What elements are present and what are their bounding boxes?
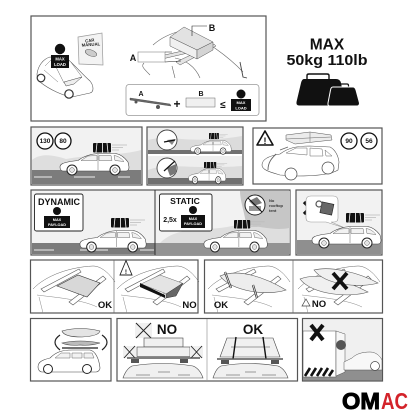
icon: high speed gauge — [157, 158, 177, 178]
icon: car manual — [78, 33, 103, 65]
panel: formula A plus B under max load: + — [173, 97, 181, 111]
panel: formula A plus B under max load: MAX — [237, 100, 246, 105]
icon: speed sign 80: 80 — [59, 138, 67, 145]
icon: no rooftop tent: rooftop — [269, 203, 284, 208]
panel: formula A plus B under max load: B — [198, 91, 204, 98]
icon: no rooftop tent: tent — [269, 208, 277, 213]
diagram: closed sunroof OK: OK — [98, 300, 112, 311]
icon: car manual: CAR — [85, 37, 96, 44]
heading: max load — [286, 36, 368, 69]
diagram: roof rack A and load B: B — [209, 23, 216, 33]
panel: speed gauges — [147, 127, 243, 185]
hazard stripes — [305, 368, 333, 376]
logo: OMAC: OM — [342, 388, 380, 414]
panel: load fitting NO and OK — [117, 318, 298, 381]
icon: black X — [311, 325, 323, 340]
icon: low speed gauge — [157, 130, 177, 150]
diagram: roof rack A and load B — [130, 23, 247, 78]
panel: roof load overview — [31, 16, 266, 121]
diagram: strapped load OK — [213, 322, 288, 378]
SUV with long roof load — [262, 132, 339, 180]
icon: luggage bags — [296, 74, 360, 106]
panel: sunroof OK and NO — [30, 260, 199, 313]
car with large load — [189, 162, 227, 184]
diagram: closed sunroof OK — [33, 266, 115, 313]
panel: formula A plus B under max load: LOAD — [235, 106, 247, 110]
icon: black X — [304, 202, 316, 214]
icon: speed sign 130: 130 — [40, 138, 51, 145]
icon: speed sign 56: 56 — [365, 138, 373, 145]
callout: dynamic max payload: PAYLOAD — [48, 223, 66, 227]
diagram: board strapped OK: OK — [214, 300, 228, 311]
heading: max load: 50kg 110lb — [286, 52, 368, 69]
car with load — [312, 213, 381, 248]
car with dynamic load — [80, 218, 146, 252]
diagram: open sunroof NO: ! — [125, 269, 127, 276]
icon: car with max load — [37, 44, 93, 98]
callout: static max payload — [160, 194, 212, 231]
callout: dynamic max payload: DYNAMIC — [38, 197, 81, 207]
diagram: overhanging load NO — [123, 322, 203, 378]
panel: formula A plus B under max load: ≤ — [220, 100, 226, 111]
icon: no rooftop tent: No — [269, 198, 275, 203]
icon: warning triangle: ! — [264, 136, 266, 146]
icon: speed sign 90: 90 — [345, 138, 353, 145]
diagram: open sunroof NO — [117, 260, 199, 313]
diagram: open sunroof NO: NO — [182, 300, 197, 311]
icon: car with max load: MAX — [55, 56, 65, 62]
heading: max load: MAX — [310, 36, 345, 54]
panel: no garage entry with load — [302, 318, 382, 381]
icon: no rooftop tent — [245, 195, 284, 215]
callout: static max payload: STATIC — [170, 196, 200, 206]
diagram: roof rack A and load B: A — [130, 53, 137, 63]
panel: formula A plus B under max load — [126, 84, 259, 116]
panel: no car wash — [296, 190, 382, 255]
logo: OMAC — [342, 388, 408, 414]
icon: car manual: MANUAL — [81, 41, 101, 48]
panel: formula A plus B under max load: A — [138, 91, 144, 98]
panel: dynamic and static payload — [31, 190, 290, 255]
car with roof load — [60, 143, 129, 175]
panel: surfboards OK and NO — [204, 260, 382, 313]
car with small load — [191, 133, 231, 154]
callout: static max payload: PAYLOAD — [184, 222, 202, 226]
callout: static max payload: MAX — [189, 217, 198, 221]
panel: van with roof box — [30, 318, 111, 381]
diagram: board strapped OK — [208, 266, 290, 313]
callout: car wash bubble — [306, 196, 345, 228]
diagram: stacked boards NO: NO — [312, 299, 326, 310]
diagram: overhanging load NO: NO — [157, 322, 177, 337]
diagram: strapped load OK: OK — [243, 322, 263, 337]
car behind garage wall — [336, 340, 382, 370]
diagram: stacked boards NO — [298, 266, 380, 313]
callout: static max payload: 2,5x — [163, 217, 177, 224]
callout: dynamic max payload: MAX — [53, 218, 62, 222]
logo: OMAC: AC — [381, 388, 408, 414]
callout: dynamic max payload — [34, 194, 83, 231]
car with static load — [204, 220, 267, 252]
icon: car with max load: LOAD — [54, 62, 66, 67]
panel: wind warning SUV — [253, 128, 382, 184]
panel: speed limit with load — [31, 127, 142, 185]
